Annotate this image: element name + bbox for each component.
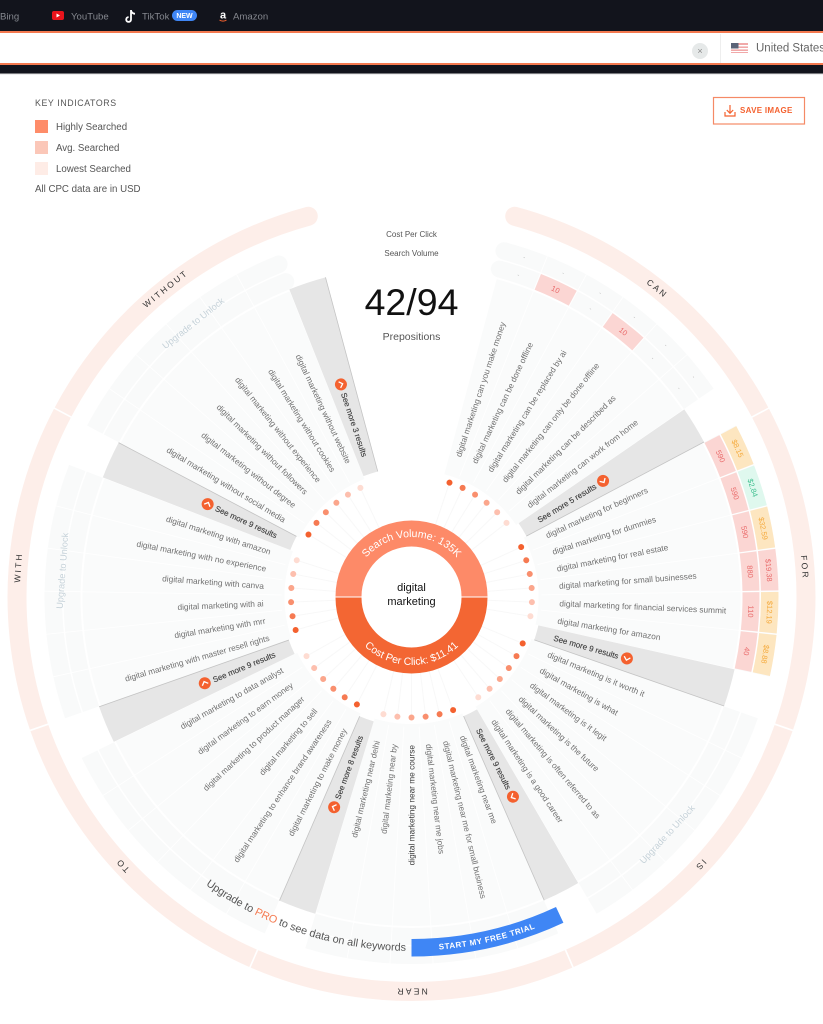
label: TO: TO (113, 856, 131, 875)
empty data markers: - (588, 306, 593, 313)
keywords: to: digital marketing to product manager (201, 694, 307, 793)
keywords: is: digital marketing is it legit (528, 680, 609, 743)
keywords: to (178, 665, 349, 864)
dots: can (446, 479, 511, 527)
legend item: lowest searched: Lowest Searched (56, 164, 131, 175)
empty data markers: - (522, 255, 526, 261)
keywords: is: digital marketing is it worth it (546, 649, 647, 699)
keywords: without: digital marketing without degree (199, 430, 298, 510)
row: for beginners (704, 426, 754, 479)
see more: for: See more 9 results (552, 634, 619, 661)
legend heading: KEY INDICATORS (35, 98, 117, 108)
keywords: for: digital marketing for amazon (557, 616, 662, 642)
upgrade to unlock: without: Upgrade to Unlock (160, 295, 226, 351)
donut: cost per click: Cost Per Click: $11.41 (366, 642, 458, 665)
keywords: near: digital marketing near delhi (349, 740, 382, 839)
ring segment: for (752, 406, 823, 731)
ring segment: to (6, 719, 262, 990)
see more: is (474, 727, 521, 805)
keywords: for: digital marketing for dummies (551, 514, 657, 557)
donut: cost per click (336, 598, 488, 674)
top navigation bar (0, 0, 823, 74)
wedge: can (513, 409, 704, 546)
keywords: with: digital marketing with ai (177, 598, 264, 612)
keywords: with: digital marketing with master resell rights (124, 633, 271, 684)
icon: US flag (731, 43, 748, 53)
see more: can: See more 5 results (536, 482, 598, 525)
nav item: Bing: Bing (0, 12, 19, 22)
label: NEAR: NEAR (395, 986, 428, 996)
keywords: with: digital marketing with amazon (165, 514, 272, 557)
wedge: is (453, 704, 578, 901)
label: IS: IS (693, 857, 709, 873)
keywords: to: digital marketing to make money (286, 726, 349, 838)
data tracks (43, 224, 792, 971)
donut: search volume: Search Volume: 135K (362, 529, 462, 558)
keywords: without: digital marketing without followers (215, 402, 310, 496)
empty data markers: - (690, 375, 696, 380)
center donut (336, 520, 488, 674)
label: CAN: CAN (645, 277, 670, 300)
center white disc (284, 470, 538, 724)
keywords: without: digital marketing without website (294, 353, 353, 465)
row: for real estate (732, 506, 776, 554)
keywords: is: digital marketing is the future (517, 694, 601, 774)
see more: to: See more 9 results (211, 650, 277, 684)
keywords: near (349, 734, 500, 900)
keywords: near: digital marketing near by (379, 743, 399, 834)
icon: download (725, 105, 735, 116)
FOR data cells (704, 426, 779, 676)
keywords: can: digital marketing can be described as (513, 393, 618, 496)
row: for dummies: $2.84 (746, 477, 760, 498)
keywords: with: digital marketing with no experience (136, 539, 268, 574)
search bar controls (692, 34, 823, 63)
button label: START MY FREE TRIAL (439, 924, 535, 950)
row: for financial services summit: 110 (746, 605, 755, 618)
caption: cost per click: Cost Per Click (386, 230, 438, 239)
row: for real estate: $32.59 (757, 516, 770, 541)
empty data markers: - (662, 343, 668, 349)
keywords: with: digital marketing with canva (162, 573, 265, 591)
ring segment: is (561, 719, 817, 990)
icon: YouTube (52, 11, 64, 20)
empty data markers: - (649, 356, 655, 362)
keywords: to: digital marketing to data analyst (178, 665, 286, 731)
CAN data cells (516, 255, 696, 391)
icon: Amazon: a (220, 10, 227, 22)
headline count: 42/94 (365, 281, 458, 323)
keywords: to: digital marketing to enhance brand awareness (231, 717, 334, 864)
see more: is: See more 9 results (474, 727, 513, 791)
see more: for (552, 634, 634, 666)
button label: SAVE IMAGE (740, 106, 793, 115)
ring segment: without (34, 178, 322, 422)
donut: search volume (336, 520, 488, 596)
volume cell: 10 (602, 313, 644, 351)
see more: without: See more 3 results (339, 392, 369, 458)
keywords: near: digital marketing near me (458, 734, 500, 825)
keywords: for: digital marketing for financial services summit (559, 598, 727, 615)
keywords: to: digital marketing to earn money (195, 680, 296, 757)
row: for amazon: 40 (742, 646, 752, 656)
row: for dummies: 590 (729, 486, 741, 501)
wedge: to (99, 629, 299, 742)
see more: near: See more 8 results (333, 735, 365, 801)
label: WITHOUT: WITHOUT (141, 267, 190, 310)
row: for financial services summit: $12.19 (764, 601, 774, 624)
label: WITH: WITH (12, 552, 24, 583)
see more: without (333, 377, 369, 458)
empty data markers: - (597, 291, 602, 297)
center keyword: digital (397, 582, 426, 594)
row: for beginners: 590 (714, 449, 727, 464)
keyword panels (81, 263, 753, 932)
country label: United States (756, 42, 823, 54)
dots: for (517, 543, 535, 620)
dots: is (474, 639, 527, 701)
axis captions (384, 230, 439, 258)
keywords: for: digital marketing for small businesses (559, 571, 697, 591)
keywords: is (489, 649, 647, 825)
keywords: to: digital marketing to sell (257, 706, 319, 777)
upgrade to unlock: with: Upgrade to Unlock (55, 532, 70, 609)
dots: without (304, 484, 364, 539)
row: for small businesses: 880 (745, 565, 755, 578)
keywords: can: digital marketing can be replaced by ai (485, 348, 569, 474)
see more: with: See more 9 results (214, 504, 278, 540)
wedge: without (289, 277, 389, 480)
legend note: All CPC data are in USD (35, 184, 141, 195)
keywords: can: digital marketing can only be done offline (500, 360, 602, 484)
nav item: TikTok: TikTok (142, 12, 170, 22)
save image button (714, 98, 804, 124)
center keyword: marketing (387, 596, 436, 608)
keywords: without: digital marketing without cookies (266, 367, 338, 474)
row: for dummies (720, 465, 767, 516)
nav item: Amazon: Amazon (233, 12, 268, 22)
empty data markers (516, 255, 696, 391)
keywords: near: digital marketing near me for small business (441, 740, 489, 900)
legend item: highly searched: Highly Searched (56, 122, 127, 133)
ring segment: can (501, 178, 789, 422)
volume cell: 10: 10 (617, 325, 629, 338)
empty data markers: - (675, 386, 681, 391)
volume cell: 10 (534, 274, 577, 306)
row: for amazon: $8.88 (759, 644, 771, 664)
see more: to (197, 650, 277, 691)
legend item: average searched: Avg. Searched (56, 143, 119, 154)
keywords: without (165, 353, 353, 525)
keywords: with (124, 514, 272, 684)
keywords: without: digital marketing without experience (233, 375, 323, 485)
keywords: can: digital marketing can be done offline (470, 340, 535, 465)
row: for financial services summit (741, 590, 779, 633)
keywords: for (544, 485, 727, 642)
keywords: with: digital marketing with mrr (174, 616, 266, 640)
spokes (294, 485, 529, 715)
icon: clear search: × (697, 46, 703, 56)
row: for small businesses: $19.38 (763, 558, 774, 582)
label: FOR: FOR (799, 555, 811, 580)
wedge: for (531, 614, 735, 706)
keywords: can: digital marketing can you make money (453, 320, 508, 458)
keywords: for: digital marketing for beginners (544, 485, 649, 540)
row: for small businesses (740, 549, 779, 593)
keywords: is: digital marketing is a good career (489, 717, 566, 825)
dots: near (380, 706, 457, 720)
keywords: near: digital marketing near me course (406, 745, 416, 865)
badge: NEW (172, 10, 197, 21)
dots: with (288, 556, 301, 634)
upgrade prompt: Upgrade to PRO to see data on all keywords (207, 879, 406, 952)
keywords: for: digital marketing for real estate (556, 542, 669, 574)
headline caption: Prepositions (383, 331, 440, 343)
keywords: can (453, 320, 640, 510)
ring segment: near (251, 950, 572, 1001)
wedge: with (102, 442, 301, 561)
start trial button (412, 907, 564, 956)
see more: can (536, 473, 611, 525)
row: for amazon (734, 629, 777, 676)
keywords: near: digital marketing near me jobs (424, 743, 447, 854)
volume cell: 10: 10 (550, 284, 561, 295)
row: for real estate: 590 (739, 525, 750, 539)
empty data markers: - (516, 273, 520, 279)
upgrade to unlock: is: Upgrade to Unlock (638, 803, 697, 866)
empty data markers: - (631, 315, 637, 321)
row: for beginners: $8.15 (730, 438, 746, 459)
ring labels (12, 267, 811, 997)
keywords: is: digital marketing is often referred to as (504, 706, 603, 820)
see more: near (326, 735, 365, 815)
nav item: YouTube: YouTube (71, 12, 109, 22)
dots: to (302, 652, 361, 708)
ring segment: with (0, 406, 71, 731)
icon: TikTok (126, 10, 135, 22)
badge: NEW: NEW (176, 13, 193, 20)
keywords: is: digital marketing is what (538, 665, 621, 718)
legend: key indicators (35, 98, 141, 195)
see-more wedges (99, 277, 735, 914)
keywords: can: digital marketing can work from home (525, 417, 640, 510)
wedge: near (279, 712, 385, 914)
keywords: without: digital marketing without social media (165, 445, 288, 525)
see more: with (200, 496, 278, 540)
caption: search volume: Search Volume (384, 249, 439, 258)
empty data markers: - (561, 271, 565, 277)
